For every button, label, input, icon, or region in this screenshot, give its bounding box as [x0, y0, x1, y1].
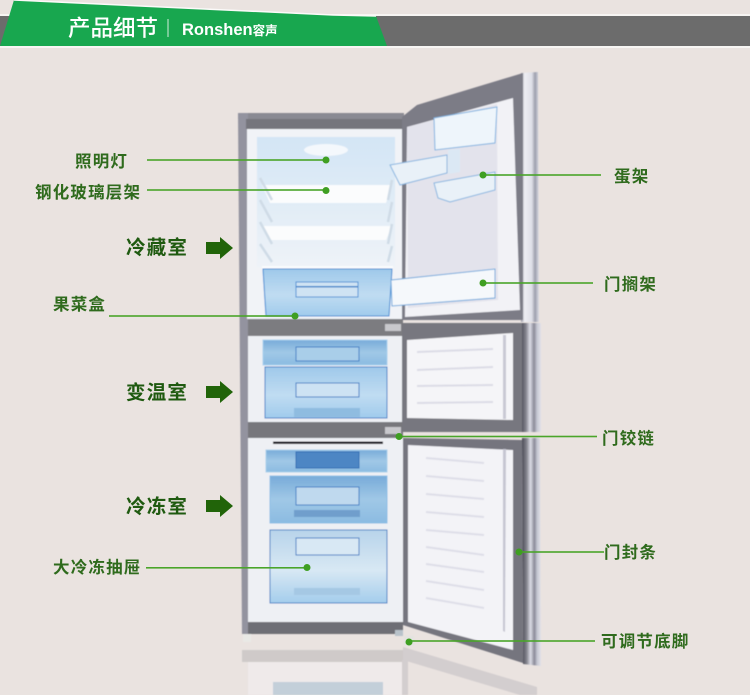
callout: 照明灯: 照明灯	[75, 152, 128, 171]
door: upper	[390, 72, 539, 322]
crisper drawer	[262, 266, 393, 316]
fridge body	[238, 113, 404, 642]
door: middle	[402, 323, 541, 432]
arrow	[206, 495, 233, 517]
callout: 可调节底脚	[406, 631, 690, 651]
banner brand: Ronshen容声	[182, 21, 278, 39]
glass shelves	[260, 178, 392, 262]
compartment label: 冷藏室: 冷藏室	[126, 236, 188, 259]
callout: 门铰链	[396, 428, 655, 448]
callout: 门搁架	[480, 275, 657, 294]
callout: 钢化玻璃层架	[35, 182, 330, 202]
callout: 门铰链: 门铰链	[602, 428, 655, 448]
callout: 钢化玻璃层架: 钢化玻璃层架	[35, 182, 141, 202]
compartment label: 变温室: 变温室	[126, 381, 188, 404]
callout: 大冷冻抽屉: 大冷冻抽屉	[53, 557, 142, 577]
door shelves	[434, 107, 497, 150]
callout: 门搁架: 门搁架	[604, 275, 657, 294]
freezer drawers	[266, 442, 387, 603]
compartment label: 冷藏室	[126, 236, 233, 259]
compartment label: 冷冻室: 冷冻室	[126, 495, 188, 518]
arrow	[206, 381, 233, 403]
callout: 果菜盒: 果菜盒	[53, 294, 106, 314]
callout: 蛋架: 蛋架	[614, 167, 649, 186]
callout: 可调节底脚: 可调节底脚	[601, 631, 690, 651]
banner title: 产品细节	[68, 16, 158, 41]
callout: 果菜盒	[53, 294, 298, 320]
door: lower	[403, 438, 541, 666]
callout: 门封条: 门封条	[604, 542, 657, 562]
header banner	[0, 0, 750, 48]
middle compartment drawers	[263, 340, 387, 418]
compartment label: 变温室	[126, 381, 233, 404]
hinges	[385, 324, 414, 646]
callout: 大冷冻抽屉	[53, 557, 310, 577]
callout: 蛋架	[480, 167, 649, 186]
compartment label: 冷冻室	[126, 495, 233, 518]
refrigerator	[238, 72, 541, 695]
reflection	[242, 647, 537, 695]
callout: 照明灯	[75, 152, 330, 171]
arrow	[206, 237, 233, 259]
callout: 门封条	[516, 542, 657, 562]
